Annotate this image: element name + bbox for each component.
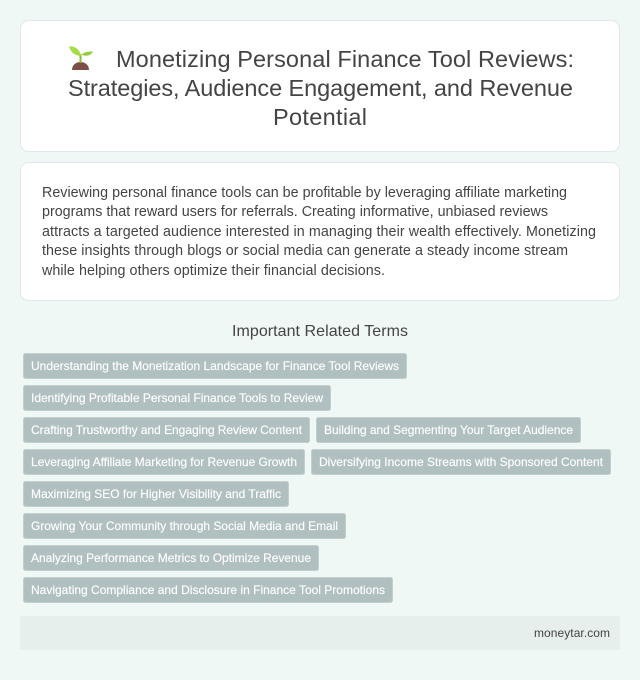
tag: Understanding the Monetization Landscape for Finance Tool Reviews [31, 359, 399, 373]
tag [24, 546, 318, 570]
tag: Leveraging Affiliate Marketing for Revenue Growth [31, 455, 297, 469]
title: Strategies, Audience Engagement, and Revenue [68, 75, 573, 101]
tag: Analyzing Performance Metrics to Optimize Revenue [31, 551, 311, 565]
panel: summary text: these insights through blogs or social media can generate a steady income stream [42, 243, 568, 259]
tag: Identifying Profitable Personal Finance Tools to Review [31, 391, 323, 405]
tag [24, 386, 330, 410]
footer [20, 616, 620, 650]
tag [312, 450, 610, 474]
panel: summary text: Reviewing personal finance tools can be profitable by leveraging affiliate marketing [42, 185, 567, 201]
heading: related terms: Important Related Terms [232, 323, 408, 340]
panel: title card [20, 20, 620, 152]
tag: Building and Segmenting Your Target Audience [324, 423, 573, 437]
footer: moneytar.com [534, 626, 610, 640]
icon: sprout [69, 46, 93, 70]
panel: summary text: while helping others optimize their financial decisions. [41, 263, 385, 279]
tag: Crafting Trustworthy and Engaging Review Content [31, 423, 303, 437]
tag: Diversifying Income Streams with Sponsored Content [319, 455, 604, 469]
panel: summary text: programs that reward users for referrals. Creating informative, unbiased reviews [42, 204, 548, 220]
tag [24, 354, 406, 378]
tag list [24, 354, 610, 602]
title: Monetizing Personal Finance Tool Reviews: [116, 46, 574, 72]
tag [24, 450, 304, 474]
tag [24, 514, 346, 538]
title [68, 46, 574, 130]
tag: Maximizing SEO for Higher Visibility and Traffic [31, 487, 281, 501]
tag: Growing Your Community through Social Media and Email [31, 519, 338, 533]
panel: summary text [20, 162, 620, 300]
title: Potential [273, 104, 367, 130]
tag [24, 578, 392, 602]
tag [316, 418, 580, 442]
tag [24, 418, 310, 442]
tag [24, 482, 288, 506]
tag: Navigating Compliance and Disclosure in Finance Tool Promotions [31, 583, 385, 597]
panel: summary text: attracts a targeted audience interested in managing their wealth effectively. Monetizing [42, 224, 596, 240]
